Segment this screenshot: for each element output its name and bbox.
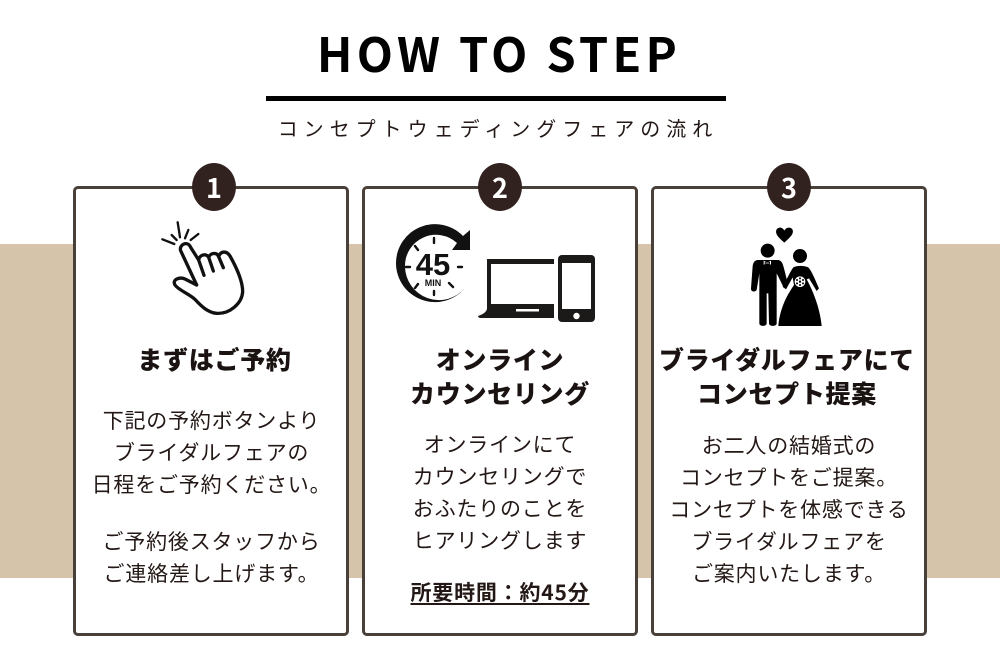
text: step 3 body line 4: ブライダルフェアを xyxy=(691,526,887,556)
text: step 3 body line 1: お二人の結婚式の xyxy=(702,430,876,460)
icon: 45 minute timer: 45 xyxy=(416,247,450,282)
badge: step 3: 3 xyxy=(781,167,797,206)
heading: step 3 line 2: コンセプト提案 xyxy=(697,375,877,411)
text: step 1 note line 1: ご予約後スタッフから xyxy=(102,526,320,556)
panel: step 3 card xyxy=(651,186,927,636)
text: step 2 body line 3: おふたりのことを xyxy=(413,493,587,523)
text: step 1 body line 3: 日程をご予約ください。 xyxy=(92,469,331,499)
subtitle: コンセプトウェディングフェアの流れ xyxy=(278,113,718,142)
icon: tapping hand xyxy=(161,221,244,315)
badge: step 1 xyxy=(192,163,236,211)
badge: step 1: 1 xyxy=(206,167,222,206)
panel: step 1 card xyxy=(73,186,349,636)
text: step 3 body line 5: ご案内いたします。 xyxy=(692,558,886,588)
panel: step 2 card xyxy=(362,186,638,636)
text: step 3 body line 2: コンセプトをご提案。 xyxy=(680,462,898,492)
title: HOW TO STEP xyxy=(317,17,681,86)
beige background band xyxy=(0,244,1000,578)
text: step 2 body line 2: カウンセリングで xyxy=(413,461,587,491)
heading: step 2 line 2: カウンセリング xyxy=(410,375,590,411)
text: step 3 body line 3: コンセプトを体感できる xyxy=(669,494,909,524)
text: step 1 note line 2: ご連絡差し上げます。 xyxy=(104,558,319,588)
icon: wedding couple xyxy=(751,228,822,326)
text: required time: 所要時間：約45分 xyxy=(410,577,589,607)
heading: step 2 line 1: オンライン xyxy=(436,341,564,377)
text: step 1 body: 下記の予約ボタンより xyxy=(103,405,320,435)
text: step 1 body line 2: ブライダルフェアの xyxy=(114,437,309,467)
heading: step 1: まずはご予約 xyxy=(137,341,292,377)
heading: step 3 line 1: ブライダルフェアにて xyxy=(659,341,915,377)
title rule xyxy=(266,96,726,101)
badge: step 3 xyxy=(767,163,811,211)
text: step 2 body line 1: オンラインにて xyxy=(424,429,576,459)
icon: 45 minute timer xyxy=(396,224,470,302)
icon: laptop and smartphone xyxy=(478,255,595,322)
icon: 45 minute timer: MIN xyxy=(425,278,441,288)
badge: step 2: 2 xyxy=(492,167,508,206)
text: step 2 body line 4: ヒアリングします xyxy=(413,525,587,555)
badge: step 2 xyxy=(478,163,522,211)
